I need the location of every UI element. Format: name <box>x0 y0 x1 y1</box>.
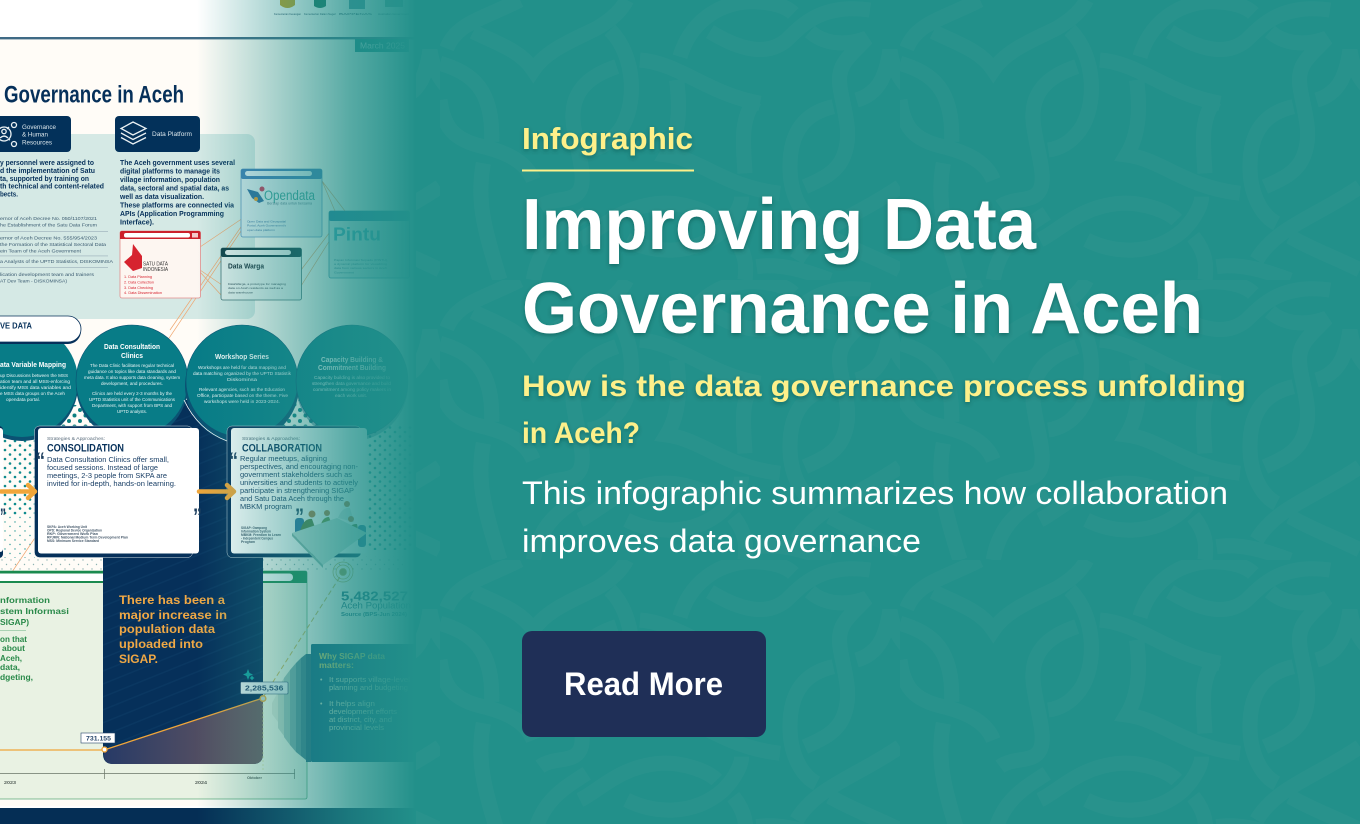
text: governance decrees: he Establishment of the Satu Data Forum <box>0 222 97 228</box>
circle: data consultation clinics: guidance on topics like data standards and <box>88 369 177 374</box>
text: governance decrees: lication development team and trainers <box>0 272 95 278</box>
chart: population data line: 2023 <box>4 780 17 785</box>
panel: why SIGAP data matters: provincial levels <box>329 725 385 732</box>
text: governance paragraph: y personnel were assigned to <box>0 158 94 167</box>
description text <box>522 475 1228 559</box>
circle: data variable mapping: ata Variable Mapping <box>0 362 66 369</box>
circle: data variable mapping <box>0 344 77 441</box>
card: consolidation: focused sessions. Instead of large <box>47 463 158 472</box>
window: Opendata: Open Data and Geospatial <box>247 220 286 224</box>
card: governance and human resources: & Human <box>22 132 48 138</box>
fade overlay: infographic into teal <box>197 0 416 824</box>
circle: data consultation clinics: meta data. It also supports data cleaning, system <box>84 375 180 380</box>
card: collaboration: participate in strengthening SIGAP <box>240 486 354 495</box>
text: SIGAP description: nformation <box>0 595 50 605</box>
circle: workshop series: Workshop Series <box>215 354 269 361</box>
window: Satu Data Indonesia: 1. Data Planning <box>124 275 152 279</box>
window: Satu Data Indonesia: SATU DATA <box>143 262 169 268</box>
logos: Kementerian Dalam Negeri <box>304 12 336 16</box>
card: consolidation: RPJMN: National Medium Term Development Plan <box>47 536 128 540</box>
card: data platform: Data Platform <box>152 131 192 138</box>
text: platform paragraph: The Aceh government uses several <box>120 158 235 167</box>
text: SIGAP description: about <box>2 644 25 653</box>
icon: population marker <box>333 562 353 582</box>
window: Data Warga: data on Aceh residents as well as a <box>228 286 283 290</box>
text: platform paragraph: These platforms are connected via <box>120 200 235 210</box>
chart: population data line: 2,285,536 <box>245 686 284 693</box>
window: Pintu: a dynamic platform for visualizing <box>334 262 387 266</box>
subtitle question <box>522 370 1246 450</box>
window: Pintu: Government <box>334 270 354 274</box>
circle: data variable mapping: opendata portal. <box>6 397 40 402</box>
text: SIGAP description: Aceh, <box>0 654 22 663</box>
window: Satu Data Indonesia: 3. Data Checking <box>124 286 153 290</box>
circle: capacity building <box>296 325 408 441</box>
card: governance and human resources: Resources <box>22 140 53 146</box>
text: governance decrees: ein Team of the Aceh Government <box>0 248 82 254</box>
card: collaboration: government stakeholders such as <box>240 470 352 479</box>
circle: data consultation clinics: UPTD analysts. <box>117 409 147 414</box>
card: collaboration: Information System <box>241 530 271 534</box>
window: SIGAP chart background <box>0 571 307 799</box>
left card edge <box>0 426 6 558</box>
chart: population data line: 731.155 <box>86 737 112 743</box>
card: consolidation: RKP: Government Work Plan <box>47 532 98 536</box>
panel: why SIGAP data matters: It helps align <box>329 701 375 708</box>
card: collaboration: Strategies & Approaches: <box>242 436 300 441</box>
circle: data variable mapping: ation team and all MSS-enforcing <box>0 379 71 384</box>
stat: Aceh population: 5,482,527 <box>341 588 408 604</box>
circle: data consultation clinics: Clinics <box>121 353 143 360</box>
panel: why SIGAP data matters: • <box>320 677 323 684</box>
panel: why SIGAP data matters <box>272 644 421 762</box>
window: Data Warga: DataWarga, a prototype for managing <box>228 282 286 286</box>
circle: capacity building: Capacity Building & <box>321 357 383 364</box>
card: collaboration: MBKM program <box>240 502 292 511</box>
logos: Australian Government <box>378 12 409 16</box>
pill: section heading: VE DATA <box>0 320 32 330</box>
window: Satu Data Indonesia: 2. Data Collection <box>124 280 154 284</box>
logos <box>274 0 409 16</box>
main title <box>522 185 1203 349</box>
text: governance decrees: a Analysts of the UPTD Statistics, DISKOMINSA <box>0 259 114 265</box>
circle: data consultation clinics <box>76 324 187 426</box>
circle: data consultation clinics: Department, with support from BPS and <box>92 403 173 408</box>
infographic title: Governance in Aceh <box>4 82 184 108</box>
card: collaboration: “ <box>229 448 238 473</box>
circle: workshop series: data matching organized by the UPTD Statistik <box>193 371 292 376</box>
logos: Kementerian Keuangan <box>274 12 301 16</box>
circle: data consultation clinics: UPTD Statistics unit of the Communications <box>89 397 175 402</box>
circle: data variable mapping: identify MSS data variables and <box>0 385 72 390</box>
stat: Aceh population: Aceh Population <box>341 600 411 610</box>
card: collaboration: Regular meetups, aligning <box>240 454 327 463</box>
text: governance decrees <box>0 216 114 284</box>
text: governance paragraph <box>0 158 104 198</box>
main title: Governance in Aceh <box>522 269 1203 349</box>
connector lines <box>10 181 345 575</box>
chart: population data line <box>0 669 295 785</box>
date tag: March 2025 <box>360 42 406 50</box>
card: consolidation: Strategies & Approaches: <box>47 436 105 441</box>
illustration: people around a table <box>292 501 367 568</box>
chart: population data line: 2024 <box>195 780 208 785</box>
text: SIGAP description: data, <box>0 663 20 672</box>
circle: data consultation clinics: The Data Clinic facilitates regular technical <box>90 363 174 368</box>
text: SIGAP description: stem Informasi <box>0 606 69 616</box>
text: governance decrees: AT Dev Team - DISKOMINSA) <box>0 278 67 284</box>
window: Satu Data Indonesia: 4. Data Dissemination <box>124 291 162 295</box>
window: Data Warga <box>221 248 302 300</box>
card: governance and human resources <box>0 116 71 152</box>
eyebrow label: Infographic <box>522 121 693 156</box>
card: consolidation: meetings, 2-3 people from SKPA are <box>47 471 167 480</box>
circle: workshop series: Relevant agencies, such as the Education <box>199 387 286 392</box>
text: platform paragraph: well as data visualization. <box>119 192 204 201</box>
text: platform paragraph: digital platforms to manage its <box>120 166 220 176</box>
card: collaboration: - Independent Campus <box>241 536 273 540</box>
card: consolidation: MSS: Minimum Service Standard <box>47 539 99 543</box>
text: major increase statement: major increase in <box>119 608 227 622</box>
circle: data consultation clinics: Data Consultation <box>104 344 160 351</box>
window: Data Warga: data warehouse <box>228 290 253 294</box>
dot fields <box>0 400 417 571</box>
pill: section heading <box>0 316 81 344</box>
text: platform paragraph: data, sectoral and spatial data, as <box>120 184 229 192</box>
stat: Aceh population <box>341 592 406 617</box>
text: major increase statement: SIGAP. <box>119 652 158 666</box>
window: Pintu: Papan Informasi Terpadu (PINTU), <box>334 258 388 262</box>
panel: why SIGAP data matters: Why SIGAP data <box>319 652 386 661</box>
circle: capacity building: Commitment Building <box>318 365 386 372</box>
circle: workshop series <box>184 325 299 443</box>
window: Opendata: Opendata <box>264 188 315 203</box>
circle: capacity building: strengthen data governance and build <box>312 381 392 386</box>
panel: why SIGAP data matters: matters: <box>319 661 354 670</box>
circle: data consultation clinics: development, and procedures. <box>101 381 163 386</box>
arrows <box>1 485 234 498</box>
text: major increase statement: population data <box>119 622 215 636</box>
panel: why SIGAP data matters: at district, city, and <box>329 717 392 724</box>
subtitle question: How is the data governance process unfolding <box>522 370 1246 403</box>
text: governance decrees: ernor of Aceh Decree No. 555/954/2023 <box>0 236 97 242</box>
main title: Improving Data <box>522 185 1037 265</box>
text: governance decrees: the Formation of the Statistical Sectoral Data <box>0 242 106 248</box>
window: Opendata: Portal, Aceh Government's <box>247 224 287 228</box>
text: major increase statement <box>119 593 227 666</box>
window: Satu Data Indonesia: INDONESIA <box>143 267 169 273</box>
window: Pintu: data from various sectors in Aceh <box>334 266 387 270</box>
card: consolidation: CONSOLIDATION <box>47 442 124 454</box>
panel: why SIGAP data matters: • <box>320 701 323 708</box>
text: major increase statement: uploaded into <box>119 637 203 651</box>
chart: population data line: Oktober <box>247 776 263 780</box>
card: collaboration: perspectives, and encouraging non- <box>240 462 359 471</box>
dashed link to population marker <box>264 572 343 696</box>
window: Opendata <box>241 169 322 237</box>
text: SIGAP description: SIGAP) <box>0 617 29 627</box>
logos: BAPPENAS <box>339 12 372 16</box>
left card edge: ” <box>0 504 6 529</box>
card: collaboration: and Satu Data Aceh through the <box>240 494 344 503</box>
button: read more: Read More <box>564 666 723 702</box>
stat: Aceh population: Source (BPS-Jun 2024) <box>341 612 407 618</box>
text: platform paragraph: village information, population <box>120 175 220 184</box>
card: collaboration <box>227 426 367 568</box>
card: collaboration: universities and students to actively <box>240 478 358 487</box>
card: consolidation: OPD: Regional Device Organization <box>47 528 102 532</box>
infographic preview image <box>0 0 421 824</box>
card: collaboration: MBKM: Freedom to Learn <box>241 533 281 537</box>
window: Opendata: Bersiap data untuk bersama <box>267 202 312 206</box>
window: Pintu <box>329 211 410 278</box>
card: consolidation <box>34 426 202 558</box>
panel: pale green platform background <box>0 134 255 319</box>
circle: capacity building: each work unit. <box>335 393 367 398</box>
card: consolidation: ” <box>193 504 202 529</box>
description text: This infographic summarizes how collaboration <box>522 475 1228 511</box>
card: consolidation: invited for in-depth, hands-on learning. <box>47 479 176 488</box>
panel: why SIGAP data matters: planning and budgeting <box>329 685 408 692</box>
text: governance paragraph: th technical and content-related <box>0 182 104 190</box>
text: governance paragraph: ta, supported by training on <box>0 174 89 183</box>
card: consolidation: Data Consultation Clinics offer small, <box>47 455 169 464</box>
text: SIGAP description: on that <box>0 635 27 644</box>
card: data platform <box>115 116 200 152</box>
circle: capacity building: Capacity building is also provided to <box>314 375 391 380</box>
text: governance paragraph: d the implementation of Satu <box>0 166 95 175</box>
date tag <box>355 39 409 52</box>
text: governance paragraph: bects. <box>0 190 18 198</box>
text: platform paragraph: APIs (Application Programming <box>120 209 224 218</box>
circle: capacity building: commitment among policy makers in <box>313 387 392 392</box>
circle: workshop series: workshops were held in 2023-2024. <box>204 399 280 404</box>
window: Data Warga: Data Warga <box>228 264 264 270</box>
card: consolidation: “ <box>36 448 45 473</box>
text: SIGAP description: dgeting, <box>0 673 33 682</box>
text: platform paragraph: Interface). <box>120 218 154 226</box>
circle: data variable mapping: e MSS data groups on the Aceh <box>0 391 66 396</box>
circle: data variable mapping: up Discussions between the MSS <box>0 373 68 378</box>
navy column <box>103 400 263 559</box>
card: consolidation: SKPA: Aceh Working Unit <box>47 525 88 529</box>
window: Pintu: Pintu <box>333 224 381 244</box>
button: read more <box>522 631 766 737</box>
navy column over the chart window <box>103 559 263 764</box>
card: collaboration: SIGAP: Gampong <box>241 526 267 530</box>
subtitle question: in Aceh? <box>522 417 640 450</box>
text: major increase statement: There has been a <box>119 593 225 607</box>
panel: why SIGAP data matters: It supports village-level <box>329 677 411 684</box>
text: governance decrees: ernor of Aceh Decree No. 050/1107/2021 <box>0 216 97 222</box>
card: governance and human resources: Governance <box>22 124 56 131</box>
card: collaboration: COLLABORATION <box>242 442 322 454</box>
text: platform paragraph <box>119 158 235 226</box>
card: collaboration: ” <box>295 504 304 529</box>
description text: improves data governance <box>522 523 921 559</box>
circle: workshop series: Diskominsa <box>227 377 258 382</box>
circle: workshop series: Workshops are held for data mapping and <box>198 365 287 370</box>
panel: why SIGAP data matters: development efforts <box>329 709 398 716</box>
circle: workshop series: Office, participate based on the theme. Five <box>197 393 289 398</box>
text: SIGAP description <box>0 595 69 682</box>
card: collaboration: Program <box>241 540 255 544</box>
window: Satu Data Indonesia <box>120 231 200 298</box>
window: Opendata: open data platform <box>247 228 276 232</box>
circle: data consultation clinics: Clinics are held every 2-3 months by the <box>92 391 173 396</box>
